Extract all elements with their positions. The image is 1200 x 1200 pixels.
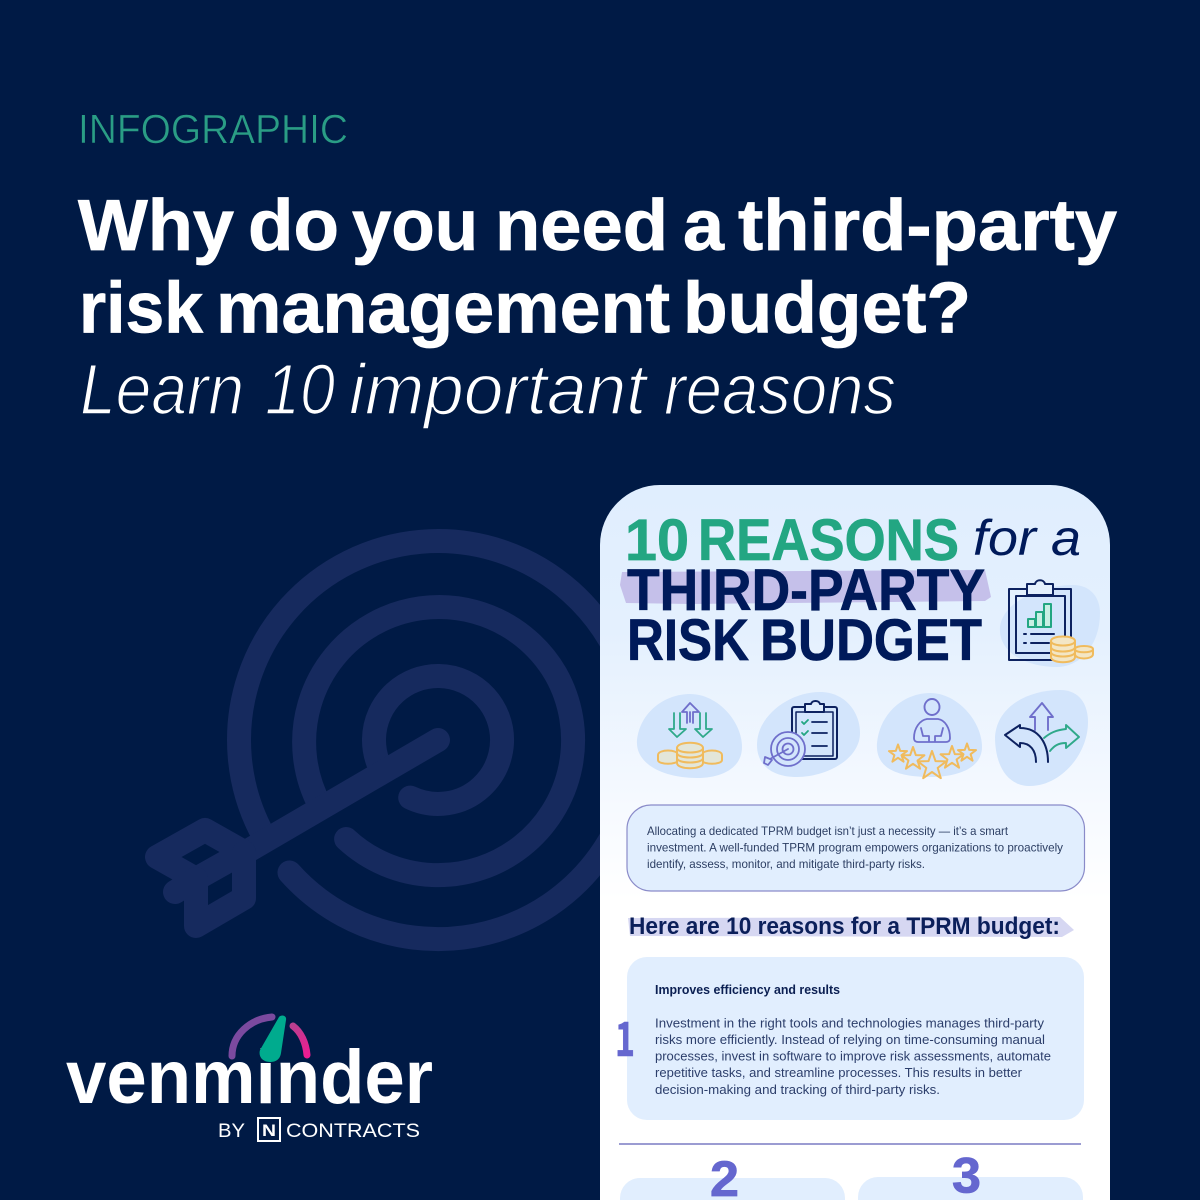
main heading: third-party [738, 186, 1117, 266]
logo byline: CONTRACTS [286, 1120, 420, 1142]
icon: crossroads arrows [995, 690, 1088, 786]
main heading: budget? [683, 268, 971, 348]
logo dial [232, 1016, 307, 1062]
reason card 1: Investment in the right tools and technologies manages third-party [655, 1016, 1045, 1030]
reason card 1 [627, 957, 1084, 1120]
icon: clipboard with chart and coins [1000, 580, 1100, 667]
reason card 1: decision-making and tracking of third-party risks. [655, 1082, 940, 1097]
reason card 1: Improves efficiency and results [655, 982, 840, 997]
number 1: 1 [615, 1001, 635, 1070]
intro callout: investment. A well-funded TPRM program empowers organizations to proactively [647, 840, 1063, 854]
reason card 1: repetitive tasks, and streamline processes. This results in better [655, 1065, 1023, 1080]
logo byline: N [262, 1121, 276, 1140]
subheading: important [349, 351, 649, 430]
icon: target with arrow watermark [157, 541, 637, 939]
panel: infographic preview card [600, 485, 1110, 1200]
subheading [80, 351, 896, 430]
intro callout [627, 805, 1084, 891]
main heading: do [248, 186, 339, 266]
icon: arrows and coins [637, 694, 742, 778]
divider [619, 1143, 1081, 1145]
main heading: Why [78, 186, 234, 266]
reason card 2 [620, 1178, 845, 1200]
reason card 1: risks more efficiently. Instead of relying on time-consuming manual [655, 1032, 1045, 1047]
section heading with highlight: Here are 10 reasons for a TPRM budget: [629, 913, 1060, 940]
main heading: need [495, 186, 668, 266]
intro callout: Allocating a dedicated TPRM budget isn’t just a necessity — it’s a smart [647, 824, 1009, 838]
reason card 1: processes, invest in software to improve risk assessments, automate [655, 1048, 1051, 1064]
logo: venminder by Ncontracts [66, 1016, 433, 1142]
eyebrow label: INFOGRAPHIC [78, 106, 348, 152]
subheading: 10 [265, 351, 335, 430]
card title: for a [973, 510, 1081, 566]
logo byline [218, 1118, 420, 1142]
icon: person with rating stars [877, 693, 982, 778]
card title: RISK [627, 608, 749, 673]
main heading: risk [79, 268, 204, 348]
card title: THIRD-PARTY [627, 558, 985, 623]
icon: clipboard checklist with target [757, 692, 860, 777]
reason card 3 [858, 1177, 1083, 1200]
main heading: management [216, 268, 670, 348]
subheading: Learn [80, 351, 244, 430]
card title: REASONS [698, 508, 959, 573]
logo byline: BY [218, 1121, 245, 1142]
card title [625, 508, 1081, 673]
card title: 10 [625, 508, 689, 573]
subheading: reasons [664, 351, 896, 430]
intro callout: identify, assess, monitor, and mitigate third-party risks. [647, 857, 925, 871]
card title: BUDGET [760, 608, 982, 673]
main heading: a [683, 186, 725, 266]
logo: venminder by Ncontracts: venminder [66, 1035, 433, 1120]
card title highlight [620, 570, 991, 604]
main heading [78, 186, 1117, 348]
main heading: you [352, 186, 478, 266]
